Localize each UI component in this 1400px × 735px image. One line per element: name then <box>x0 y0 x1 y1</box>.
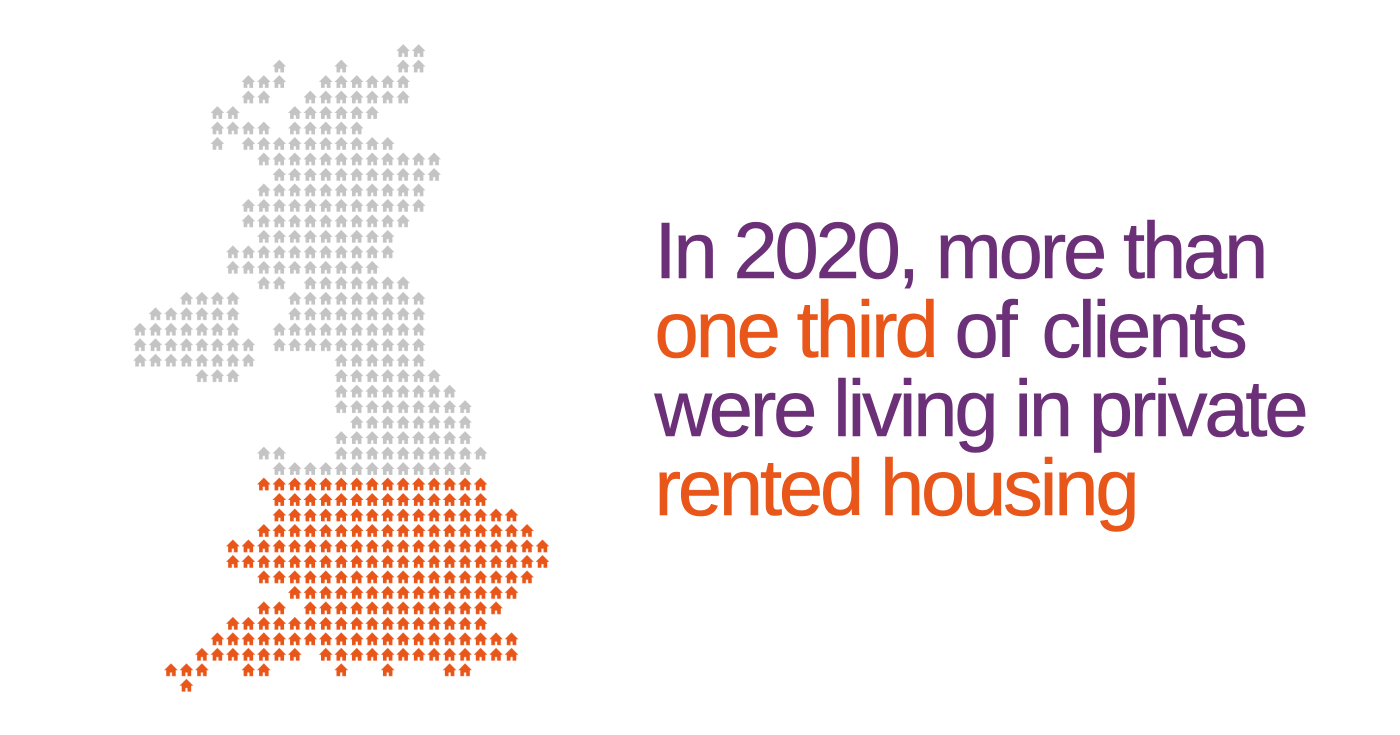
grey houses: two thirds of the map <box>132 43 488 477</box>
headline text <box>654 206 1306 532</box>
headline line 2: one third of clients <box>654 284 1245 374</box>
headline line 3: were living in private <box>654 364 1305 452</box>
map of the UK made of house icons <box>133 44 550 692</box>
headline line 1: In 2020, more than <box>654 206 1265 294</box>
headline line 4: rented housing <box>654 442 1136 532</box>
orange houses: one third of the map <box>163 476 550 693</box>
